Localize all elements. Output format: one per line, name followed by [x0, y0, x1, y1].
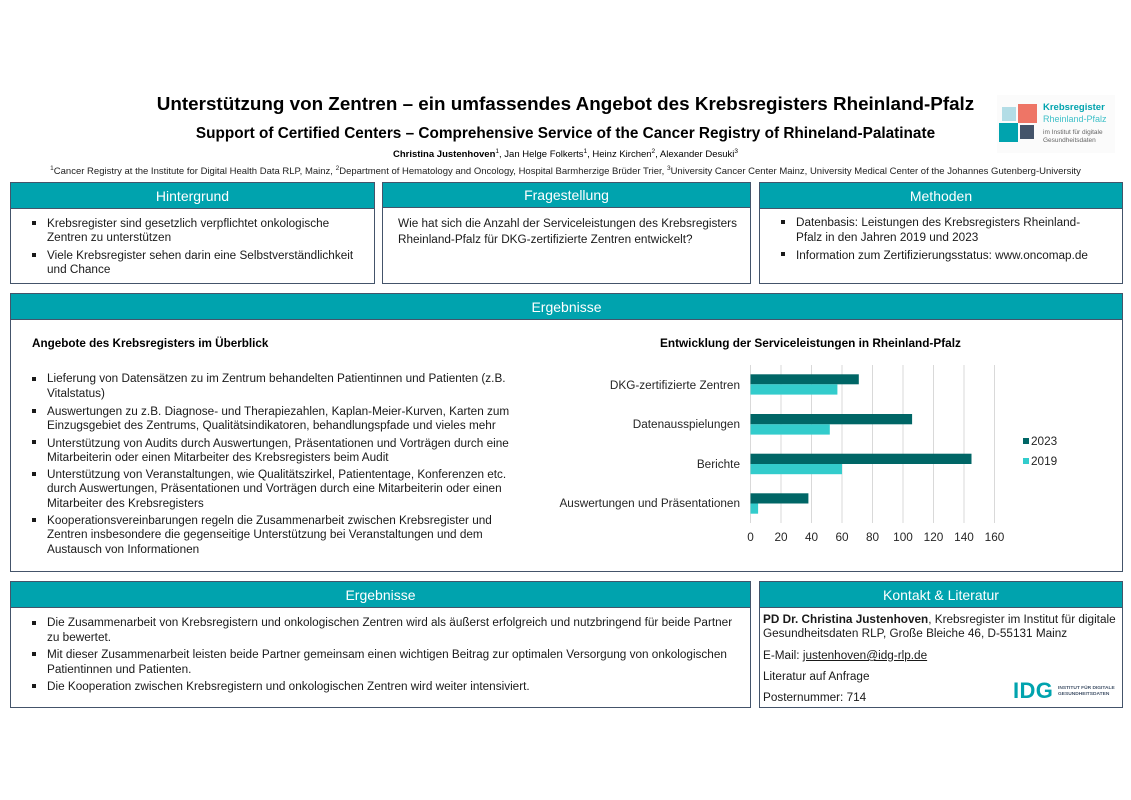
bullet list: Angebote: Unterstützung von Veranstaltungen, wie Qualitätszirkel, Patiententage, Konferenzen etc. [47, 468, 506, 481]
bar chart: Serviceleistungen 2023 vs 2019: 80 [866, 531, 879, 544]
bullet list: Angebote: Vitalstatus) [47, 387, 105, 400]
bar chart: Serviceleistungen 2023 vs 2019: 140 [954, 531, 974, 544]
logo: IDG: INSTITUT FÜR DIGITALE [1058, 686, 1115, 691]
bar chart: Serviceleistungen 2023 vs 2019: 60 [835, 531, 849, 544]
bar chart: Serviceleistungen 2023 vs 2019: 2019 [1031, 455, 1057, 468]
bar chart: Serviceleistungen 2023 vs 2019: 0 [747, 531, 754, 544]
bullet list: Hintergrund: Krebsregister sind gesetzlich verpflichtet onkologische [47, 217, 329, 230]
logo: Krebsregister Rheinland-Pfalz [997, 95, 1115, 153]
affiliations: 1Cancer Registry at the Institute for Digital Health Data RLP, Mainz, 2Department of Hematology and Oncology, Hospital Barmherzige Brüder Trier, 3University Cancer Center Mainz, University Medical Center of the Johannes Gutenberg-University [50, 165, 1081, 177]
bar chart: Serviceleistungen 2023 vs 2019: DKG-zertifizierte Zentren [610, 379, 740, 392]
logo: IDG: IDG [1013, 678, 1053, 703]
heading: Ergebnisse [11, 294, 1122, 320]
bar chart: Serviceleistungen 2023 vs 2019: 2023 [1031, 435, 1058, 448]
bullet list: Hintergrund: Zentren zu unterstützen [47, 231, 171, 244]
heading: Kontakt & Literatur [760, 582, 1122, 608]
bullet list: Hintergrund: Viele Krebsregister sehen darin eine Selbstverständlichkeit [47, 249, 353, 262]
contact text: Gesundheitsdaten RLP, Große Bleiche 46, D-55131 Mainz [763, 627, 1067, 640]
text: Fragestellung: Wie hat sich die Anzahl der Serviceleistungen des Krebsregisters [398, 217, 737, 230]
panel: Hintergrund [10, 182, 375, 284]
title: Unterstützung von Zentren – ein umfassendes Angebot des Krebsregisters Rheinland-Pfalz [157, 93, 974, 114]
bar chart: Serviceleistungen 2023 vs 2019: Berichte [697, 458, 740, 471]
bullet list: Hintergrund: und Chance [47, 263, 110, 276]
bar chart: Serviceleistungen 2023 vs 2019: 20 [774, 531, 788, 544]
logo: IDG [1013, 678, 1115, 703]
bar chart: Serviceleistungen 2023 vs 2019: Auswertungen und Präsentationen [559, 497, 740, 510]
bullet list: Angebote: Lieferung von Datensätzen zu im Zentrum behandelten Patientinnen und Patienten (z.B. [47, 372, 506, 385]
logo: Krebsregister Rheinland-Pfalz: Gesundheitsdaten [1043, 137, 1096, 144]
panel: Kontakt & Literatur [759, 581, 1123, 708]
bullet list: Methoden: Information zum Zertifizierungsstatus: www.oncomap.de [796, 249, 1088, 262]
panel: Methoden [759, 182, 1123, 284]
bullet list: Methoden: Pfalz in den Jahren 2019 und 2023 [796, 231, 978, 244]
bar chart: Serviceleistungen 2023 vs 2019: 160 [985, 531, 1005, 544]
bullet list: conclusions: zu bewertet. [47, 631, 111, 644]
chart title: Entwicklung der Serviceleistungen in Rheinland-Pfalz [660, 336, 961, 350]
bullet list: Angebote: Zentren insbesondere die gegenseitige Unterstützung bei Veranstaltungen und dem [47, 528, 483, 541]
contact text: Posternummer: 714 [763, 691, 866, 704]
heading: Ergebnisse: Ergebnisse [531, 299, 602, 315]
bullet list: conclusions: Patientinnen und Patienten. [47, 663, 191, 676]
bullet list: conclusions: Mit dieser Zusammenarbeit leisten beide Partner gemeinsam einen wichtigen Beitrag zur optimalen Versorgung von onkologischen [47, 648, 727, 661]
heading: Methoden [760, 183, 1122, 209]
contact text: PD Dr. Christina Justenhoven, Krebsregister im Institut für digitale [763, 613, 1116, 626]
subheading: Angebote: Angebote des Krebsregisters im Überblick [32, 337, 268, 350]
bar chart: Serviceleistungen 2023 vs 2019: 120 [924, 531, 944, 544]
bullet list: Angebote: Mitarbeiterin oder einen Mitarbeiter des Krebsregisters beim Audit [47, 451, 389, 464]
bullet list: Hintergrund [32, 217, 354, 276]
heading: Fragestellung: Fragestellung [524, 187, 609, 203]
bullet list: Angebote: Kooperationsvereinbarungen regeln die Zusammenarbeit zwischen Krebsregister und [47, 514, 492, 527]
panel: Ergebnisse (conclusions) [10, 581, 751, 708]
bar chart: Serviceleistungen 2023 vs 2019: 100 [893, 531, 913, 544]
heading: Hintergrund [11, 183, 374, 209]
contact text: E-Mail: justenhoven@idg-rlp.de [763, 649, 927, 662]
heading: Fragestellung [383, 183, 750, 208]
contact text [763, 613, 1116, 704]
heading: Ergebnisse [11, 582, 750, 608]
bullet list: Angebote [32, 372, 509, 556]
bar chart: Serviceleistungen 2023 vs 2019: Datenausspielungen [633, 418, 740, 431]
logo: Krebsregister Rheinland-Pfalz: Rheinland-Pfalz [1043, 114, 1107, 124]
text: Fragestellung: Rheinland-Pfalz für DKG-zertifizierte Zentren entwickelt? [398, 233, 693, 246]
logo: Krebsregister Rheinland-Pfalz: Krebsregister [1043, 102, 1105, 113]
bullet list: Angebote: Unterstützung von Audits durch Auswertungen, Präsentationen und Vorträgen durch eine [47, 437, 509, 450]
bullet list: conclusions [32, 616, 732, 693]
bullet list: Angebote: Mitarbeiter des Krebsregisters [47, 497, 204, 510]
panel: Ergebnisse (main) [10, 293, 1123, 572]
heading: Methoden: Methoden [910, 188, 972, 204]
heading: Kontakt & Literatur: Kontakt & Literatur [883, 587, 999, 603]
text: Fragestellung [398, 217, 737, 246]
bullet list: Methoden [781, 216, 1088, 262]
bullet list: conclusions: Die Kooperation zwischen Krebsregistern und onkologischen Zentren wird weiter intensiviert. [47, 680, 530, 693]
contact text: Literatur auf Anfrage [763, 670, 869, 683]
bullet list: Methoden: Datenbasis: Leistungen des Krebsregisters Rheinland- [796, 216, 1080, 229]
authors: Christina Justenhoven1, Jan Helge Folkerts1, Heinz Kirchen2, Alexander Desuki3 [393, 148, 738, 160]
bullet list: Angebote: Austausch von Informationen [47, 543, 199, 556]
heading: Ergebnisse: Ergebnisse [345, 587, 416, 603]
bar chart: Serviceleistungen 2023 vs 2019 [559, 365, 1058, 544]
bullet list: Angebote: Auswertungen zu z.B. Diagnose- und Therapiezahlen, Kaplan-Meier-Kurven, Karten zum [47, 405, 509, 418]
bullet list: Angebote: Einzugsgebiet des Zentrums, Qualitätsindikatoren, behandlungspfade und vieles mehr [47, 419, 496, 432]
subtitle: Support of Certified Centers – Comprehensive Service of the Cancer Registry of Rhineland-Palatinate [196, 125, 935, 142]
bar chart: Serviceleistungen 2023 vs 2019: 40 [805, 531, 818, 544]
logo: Krebsregister Rheinland-Pfalz: im Institut für digitale [1043, 129, 1103, 136]
heading: Hintergrund: Hintergrund [156, 188, 229, 204]
logo: IDG: GESUNDHEITSDATEN [1058, 692, 1109, 697]
bullet list: Angebote: durch Auswertungen, Präsentationen und Vorträgen durch eine Mitarbeiterin oder einen [47, 482, 502, 495]
panel: Fragestellung [382, 182, 751, 284]
bullet list: conclusions: Die Zusammenarbeit von Krebsregistern und onkologischen Zentren wird als äußerst erfolgreich und nutzbringend für beide Partner [47, 616, 732, 629]
